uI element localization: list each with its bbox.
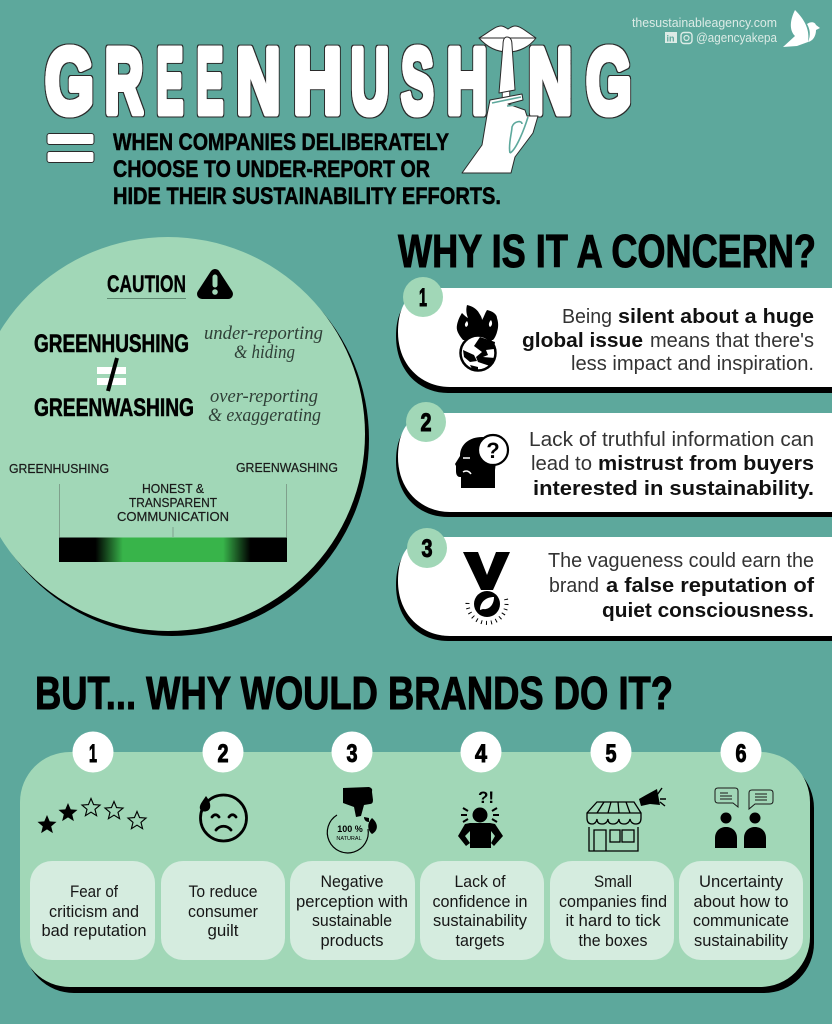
icon: thumbs down on natural label: NATURAL bbox=[336, 836, 362, 842]
title: G bbox=[45, 29, 94, 133]
title: N bbox=[236, 29, 280, 133]
caution heading: CAUTION bbox=[107, 271, 186, 298]
spectrum labels: COMMUNICATION bbox=[117, 510, 229, 524]
number badge 3 bbox=[407, 528, 447, 568]
reason 6 label: Uncertainty bbox=[699, 873, 784, 891]
reason 1 bbox=[30, 732, 155, 960]
title: I bbox=[502, 29, 510, 133]
reason 4 label: targets bbox=[456, 932, 504, 950]
reason 1 label: criticism and bbox=[49, 903, 139, 921]
icon: medal bbox=[463, 552, 510, 623]
icon: questioning head bbox=[455, 435, 508, 488]
reason 3 label: sustainable bbox=[312, 912, 392, 930]
title: E bbox=[197, 29, 223, 133]
reason 3 label: products bbox=[320, 932, 384, 950]
panel: concern 1 bbox=[396, 277, 832, 393]
heading: why would brands do it: BUT... WHY WOULD BRANDS DO IT? bbox=[35, 667, 673, 719]
icon: lips and shushing hand bbox=[462, 26, 538, 173]
spectrum labels: GREENWASHING bbox=[236, 461, 338, 475]
reason 6 label: sustainability bbox=[694, 932, 789, 950]
icon: burning earth bbox=[457, 305, 498, 370]
handwritten notes: under-reporting bbox=[204, 323, 323, 344]
concern 2 text: Lack of truthful information can bbox=[529, 429, 814, 451]
icon: shop with megaphone bbox=[587, 788, 666, 851]
concern 3 text: a false reputation of bbox=[606, 575, 814, 597]
reason 4 label: confidence in bbox=[432, 893, 528, 911]
concern 2 text: lead to bbox=[531, 453, 592, 475]
concern 3 text: The vagueness could earn the bbox=[548, 550, 814, 572]
spectrum labels bbox=[9, 461, 338, 524]
reason 4 label bbox=[432, 873, 528, 950]
concern 1 text: Being bbox=[562, 306, 612, 328]
handwritten notes: over-reporting bbox=[210, 386, 318, 407]
reason 3: 3 bbox=[346, 740, 358, 768]
reason 2 bbox=[161, 732, 285, 960]
spectrum labels: GREENHUSHING bbox=[9, 462, 109, 476]
reason 6 label: communicate bbox=[693, 912, 789, 930]
concern 2 text: interested in sustainability. bbox=[533, 478, 814, 500]
concern 1 text bbox=[522, 306, 814, 375]
reason 5 label: the boxes bbox=[578, 932, 648, 950]
concern 3 text bbox=[548, 550, 814, 622]
concern 2 text bbox=[529, 429, 814, 500]
number badge 2: 2 bbox=[420, 409, 432, 437]
number badge 1: 1 bbox=[419, 284, 427, 312]
title: G bbox=[586, 29, 632, 133]
concern 1 text: less impact and inspiration. bbox=[571, 353, 814, 375]
number badge 2 bbox=[406, 402, 446, 442]
definition text: CHOOSE TO UNDER-REPORT OR bbox=[113, 156, 430, 183]
reason 4 label: sustainability bbox=[433, 912, 528, 930]
brand credit bbox=[632, 16, 777, 45]
reason 5 label bbox=[559, 873, 667, 950]
icon: thumbs down on natural label: 100 % bbox=[337, 824, 363, 834]
definition text: HIDE THEIR SUSTAINABILITY EFFORTS. bbox=[113, 183, 501, 210]
spectrum labels: HONEST & bbox=[142, 482, 205, 496]
panel: caution circle bbox=[0, 237, 369, 636]
concern 3 text: brand bbox=[549, 575, 599, 597]
reason 3 label: Negative bbox=[320, 873, 384, 891]
icon: confused person: ?! bbox=[478, 788, 494, 807]
icon: star rating bbox=[37, 798, 146, 833]
title: E bbox=[157, 29, 183, 133]
number badge 3: 3 bbox=[422, 535, 432, 563]
icon: bird logo bbox=[783, 10, 820, 47]
reason 6 label bbox=[693, 873, 789, 950]
brand credit: @agencyakepa bbox=[696, 31, 777, 45]
reason 2 label: guilt bbox=[208, 922, 239, 940]
reason 3 bbox=[290, 732, 415, 960]
concern 1 text: global issue bbox=[522, 330, 643, 352]
title: N bbox=[528, 29, 572, 133]
caution heading bbox=[107, 271, 186, 298]
reason 3 label bbox=[296, 873, 408, 950]
greenhushing vs greenwashing: GREENHUSHING bbox=[34, 330, 189, 358]
title: U bbox=[351, 29, 389, 133]
reason 5 label: Small bbox=[594, 873, 632, 891]
equals sign bbox=[47, 134, 94, 162]
handwritten notes: & hiding bbox=[234, 342, 295, 363]
reason 6: 6 bbox=[736, 740, 746, 768]
reason 2 label bbox=[188, 883, 258, 940]
reason 6 bbox=[679, 732, 803, 960]
title: H bbox=[447, 29, 487, 133]
reason 4 label: Lack of bbox=[454, 873, 506, 891]
spectrum bar bbox=[59, 484, 287, 562]
reason 5: 5 bbox=[606, 740, 617, 768]
reason 3 label: perception with bbox=[296, 893, 408, 911]
reason 1 label: Fear of bbox=[70, 883, 118, 901]
concern 1 text: means that there's bbox=[650, 330, 814, 352]
not-equal sign bbox=[97, 358, 126, 391]
reason 2: 2 bbox=[218, 740, 228, 768]
handwritten notes bbox=[204, 323, 323, 426]
reason 5 bbox=[550, 732, 674, 960]
icon: warning triangle bbox=[202, 274, 228, 295]
panel: concern 3 bbox=[396, 528, 832, 641]
handwritten notes: & exaggerating bbox=[208, 405, 321, 426]
reason 1: 1 bbox=[89, 740, 97, 768]
number badge 1 bbox=[403, 277, 443, 317]
panel: reasons bbox=[20, 732, 814, 993]
reason 6 label: about how to bbox=[694, 893, 788, 911]
icon: thumbs down on natural label bbox=[327, 787, 377, 853]
title: R bbox=[105, 29, 143, 133]
reason 5 label: companies find bbox=[559, 893, 667, 911]
icon: two people talking bbox=[715, 788, 773, 848]
reason 2 label: To reduce bbox=[188, 883, 258, 901]
icon: guilty face bbox=[200, 795, 246, 841]
icon: questioning head: ? bbox=[486, 438, 500, 463]
definition text bbox=[113, 129, 501, 210]
concern 2 text: mistrust from buyers bbox=[598, 453, 814, 475]
reason 5 label: it hard to tick bbox=[566, 912, 661, 930]
title: H bbox=[293, 29, 342, 133]
title: S bbox=[401, 29, 434, 133]
reason 1 label bbox=[42, 883, 146, 940]
greenhushing vs greenwashing bbox=[34, 330, 194, 422]
brand credit: thesustainableagency.com bbox=[632, 16, 777, 30]
panel: concern 2 bbox=[396, 402, 832, 517]
definition text: WHEN COMPANIES DELIBERATELY bbox=[113, 129, 449, 156]
reason 2 label: consumer bbox=[188, 903, 258, 921]
reason 4 bbox=[420, 732, 544, 960]
spectrum labels: TRANSPARENT bbox=[129, 496, 217, 510]
concern 3 text: quiet consciousness. bbox=[602, 600, 814, 622]
reason 1 label: bad reputation bbox=[42, 922, 146, 940]
greenhushing vs greenwashing: GREENWASHING bbox=[34, 394, 194, 422]
concern 1 text: silent about a huge bbox=[618, 306, 814, 328]
icon: confused person bbox=[458, 788, 503, 848]
brand credit: in bbox=[666, 34, 674, 44]
reason 4: 4 bbox=[475, 740, 487, 768]
